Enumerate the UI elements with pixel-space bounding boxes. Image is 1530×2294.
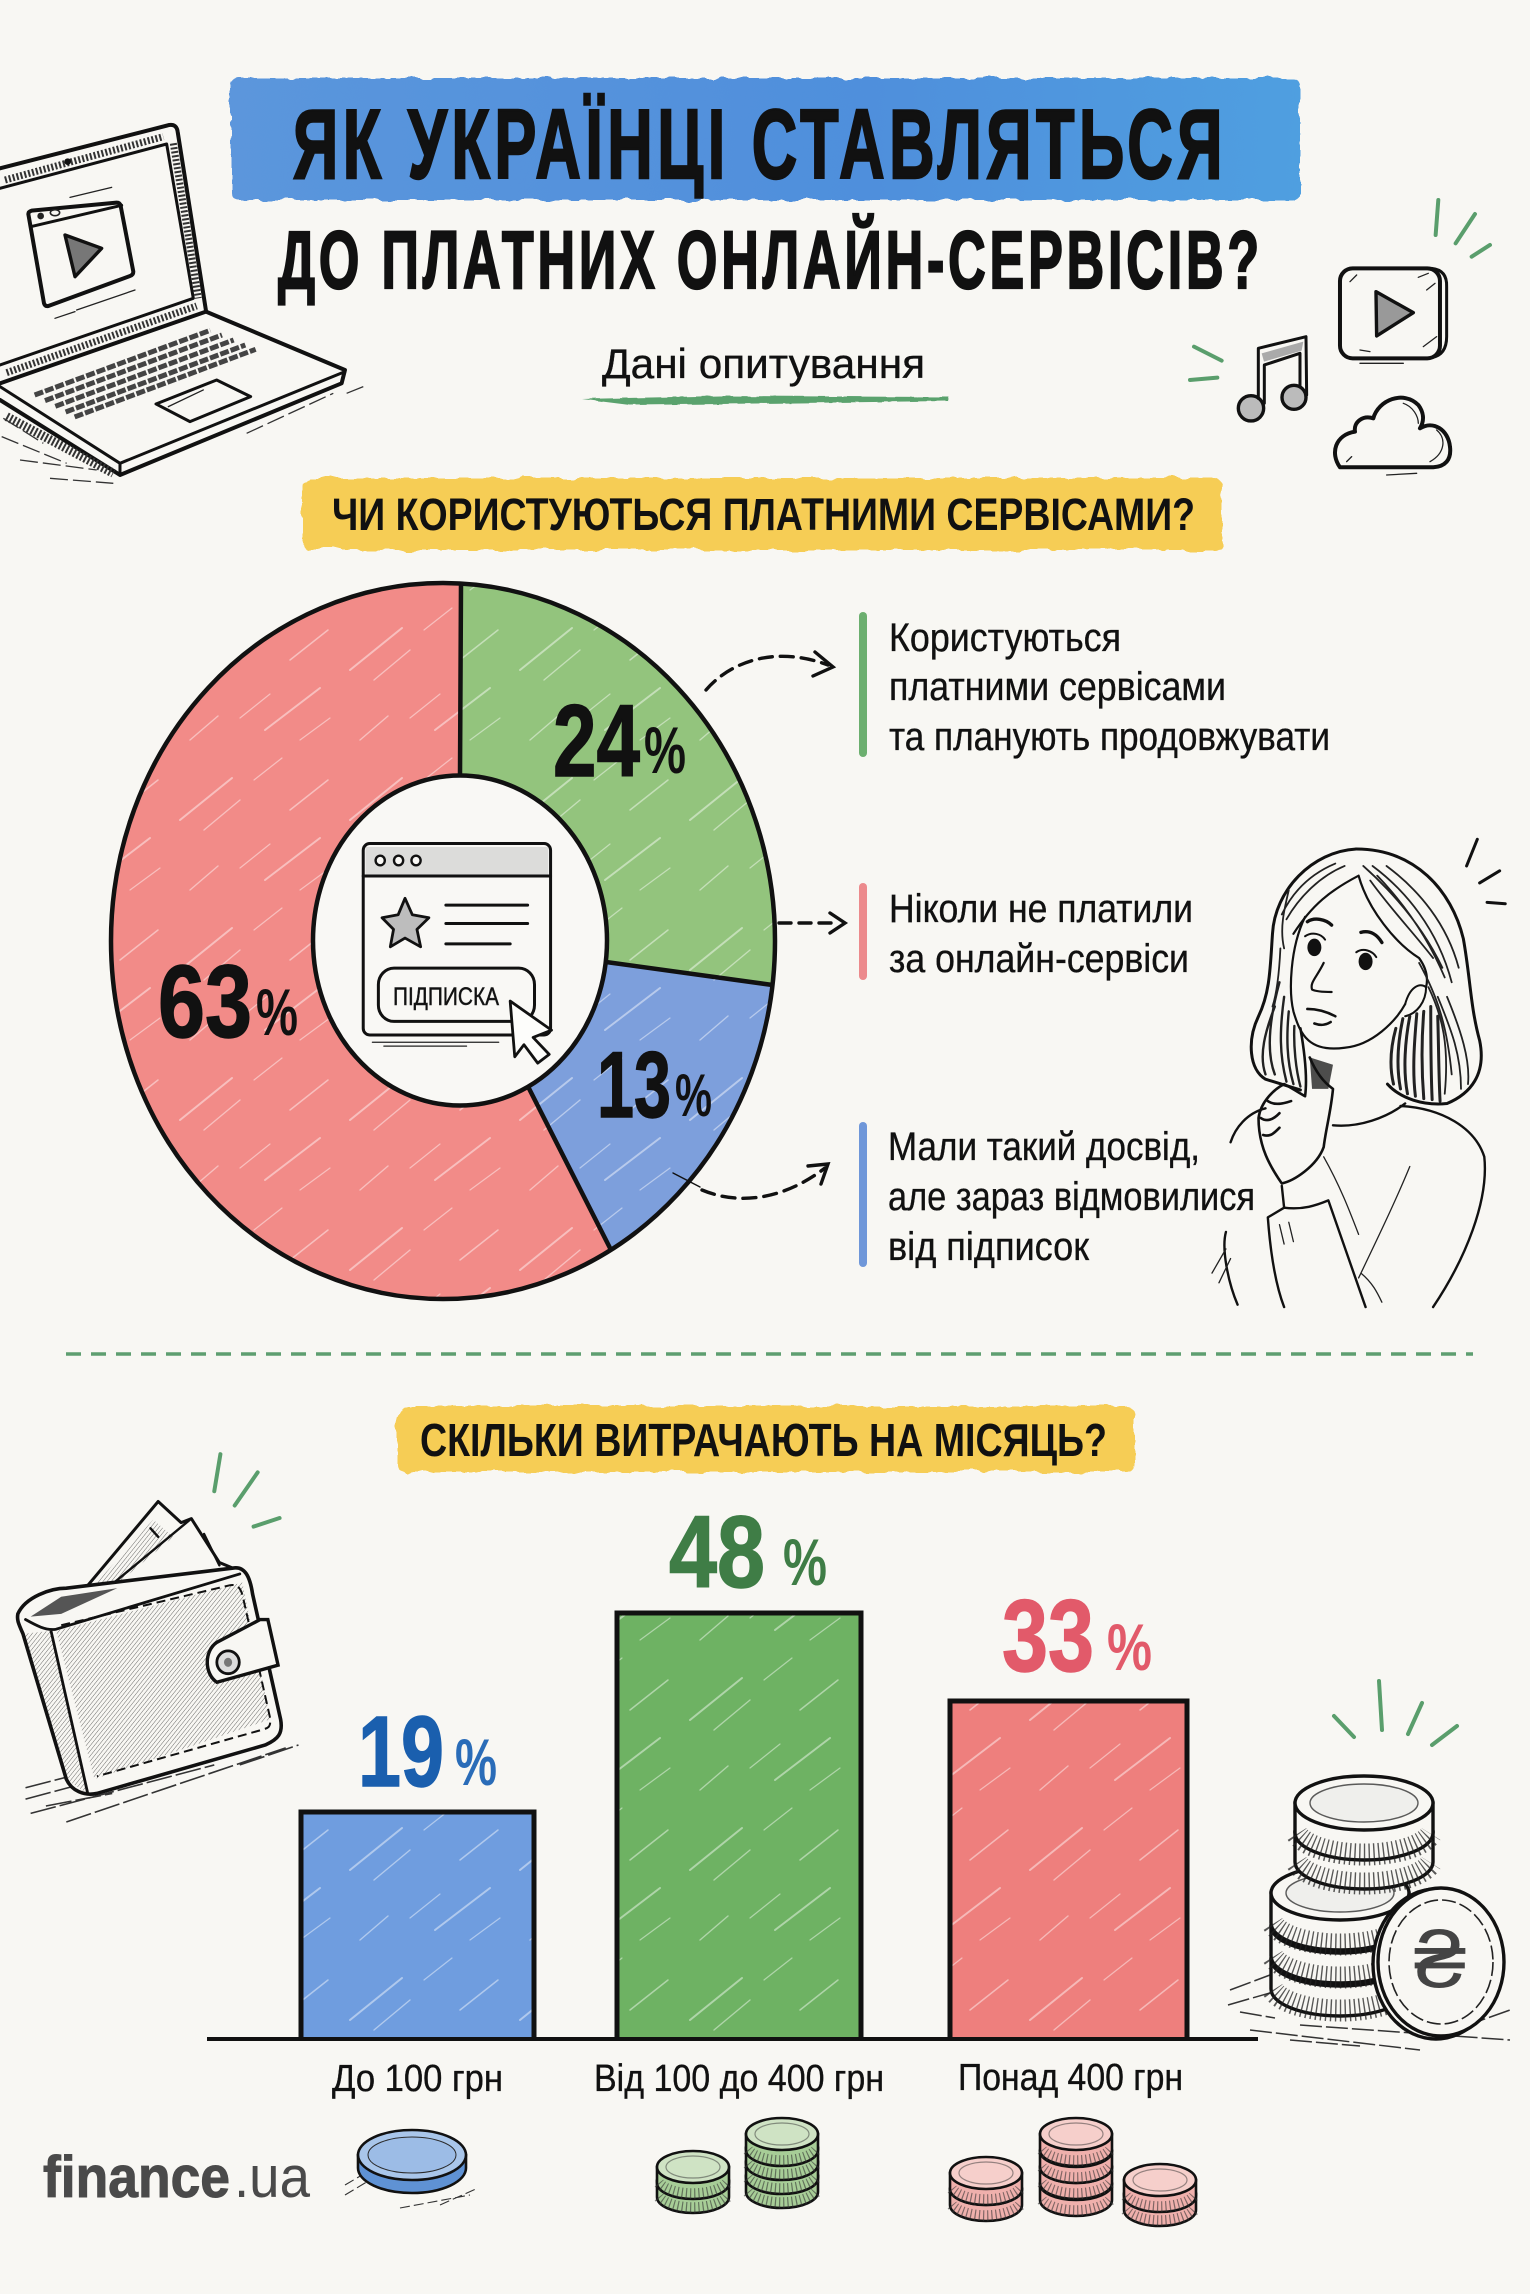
icon: video player <box>1340 268 1447 363</box>
subtitle: Дані опитування <box>602 340 925 387</box>
title block <box>231 78 1300 306</box>
value 13%: 13 <box>597 1032 671 1137</box>
legend: green item: Користуються <box>889 616 1121 660</box>
coins: green <box>657 2118 818 2213</box>
category labels: Понад 400 грн <box>958 2057 1183 2099</box>
legend: green item: платними сервісами <box>889 665 1226 709</box>
icon: wallet <box>18 1454 298 1822</box>
donut centre circle <box>313 776 607 1106</box>
coins: blue <box>345 2130 478 2208</box>
legend: blue item: Мали такий досвід, <box>888 1125 1200 1169</box>
segment: blue 13% <box>528 962 772 1250</box>
hryvnia sign: ₴ <box>1414 1915 1466 2004</box>
arrow: blue to legend <box>673 1164 828 1198</box>
section heading: usage <box>302 478 1222 550</box>
segment: red 63% <box>111 583 611 1299</box>
bar: понад 400 грн <box>950 1701 1187 2038</box>
value 48%: % <box>783 1525 827 1599</box>
legend: blue item: від підписок <box>888 1225 1089 1269</box>
button label: ПІДПИСКА <box>393 983 499 1011</box>
icon: coin stack with hryvnia <box>1228 1681 1510 2050</box>
legend: red item <box>859 883 1193 981</box>
category labels: Від 100 до 400 грн <box>594 2058 884 2100</box>
logo: finance.ua: finance <box>43 2145 230 2210</box>
legend: red item: за онлайн-сервіси <box>889 937 1189 981</box>
icons: media cluster top right <box>1190 200 1490 475</box>
category labels <box>332 2057 1183 2100</box>
legend: blue item <box>859 1122 1255 1269</box>
value 19%: % <box>455 1725 497 1799</box>
donut outlines <box>111 583 775 1299</box>
bar: від 100 до 400 грн <box>617 1613 861 2038</box>
icon: subscription window <box>363 844 551 1063</box>
hair strands <box>1272 864 1468 1094</box>
green ticks left of note <box>1190 347 1222 380</box>
donut chart <box>111 583 775 1299</box>
icon: cloud <box>1335 398 1450 475</box>
value 24%: % <box>644 713 686 787</box>
value 19%: 19 <box>358 1696 444 1808</box>
section heading: usage: ЧИ КОРИСТУЮТЬСЯ ПЛАТНИМИ СЕРВІСАМИ? <box>332 489 1195 540</box>
category labels: До 100 грн <box>332 2058 503 2100</box>
divider dashed line <box>66 1352 1473 1356</box>
value 13%: % <box>675 1062 712 1129</box>
title banner: blue brush stroke <box>231 78 1300 200</box>
segment: green 24% <box>460 584 775 985</box>
legend: green item <box>859 612 1330 759</box>
bar chart <box>207 1495 1258 2100</box>
coins: red <box>950 2118 1196 2226</box>
value 24%: 24 <box>553 684 640 798</box>
section heading: monthly spending: СКІЛЬКИ ВИТРАЧАЮТЬ НА МІСЯЦЬ? <box>420 1414 1107 1466</box>
logo: finance.ua: .ua <box>234 2145 311 2210</box>
value 33%: 33 <box>1002 1579 1094 1693</box>
value 48%: 48 <box>669 1495 765 1609</box>
bar: до 100 грн <box>301 1812 534 2038</box>
legend: red item: Ніколи не платили <box>889 887 1193 931</box>
value 33%: % <box>1107 1610 1152 1684</box>
subtitle <box>582 340 949 405</box>
axis line <box>207 2037 1258 2041</box>
value 63%: 63 <box>158 944 252 1059</box>
legend: blue item: але зараз відмовилися <box>888 1175 1255 1219</box>
value 63%: % <box>256 975 298 1049</box>
legend: green item: та планують продовжувати <box>889 715 1330 759</box>
icon: music note <box>1238 337 1307 421</box>
icon: laptop <box>0 125 363 483</box>
arrow: green to legend <box>706 652 833 690</box>
icon: thinking woman <box>1212 839 1505 1307</box>
arrow: red to legend <box>779 913 845 933</box>
section heading: monthly spending <box>397 1406 1134 1472</box>
green ticks above player <box>1436 200 1490 257</box>
